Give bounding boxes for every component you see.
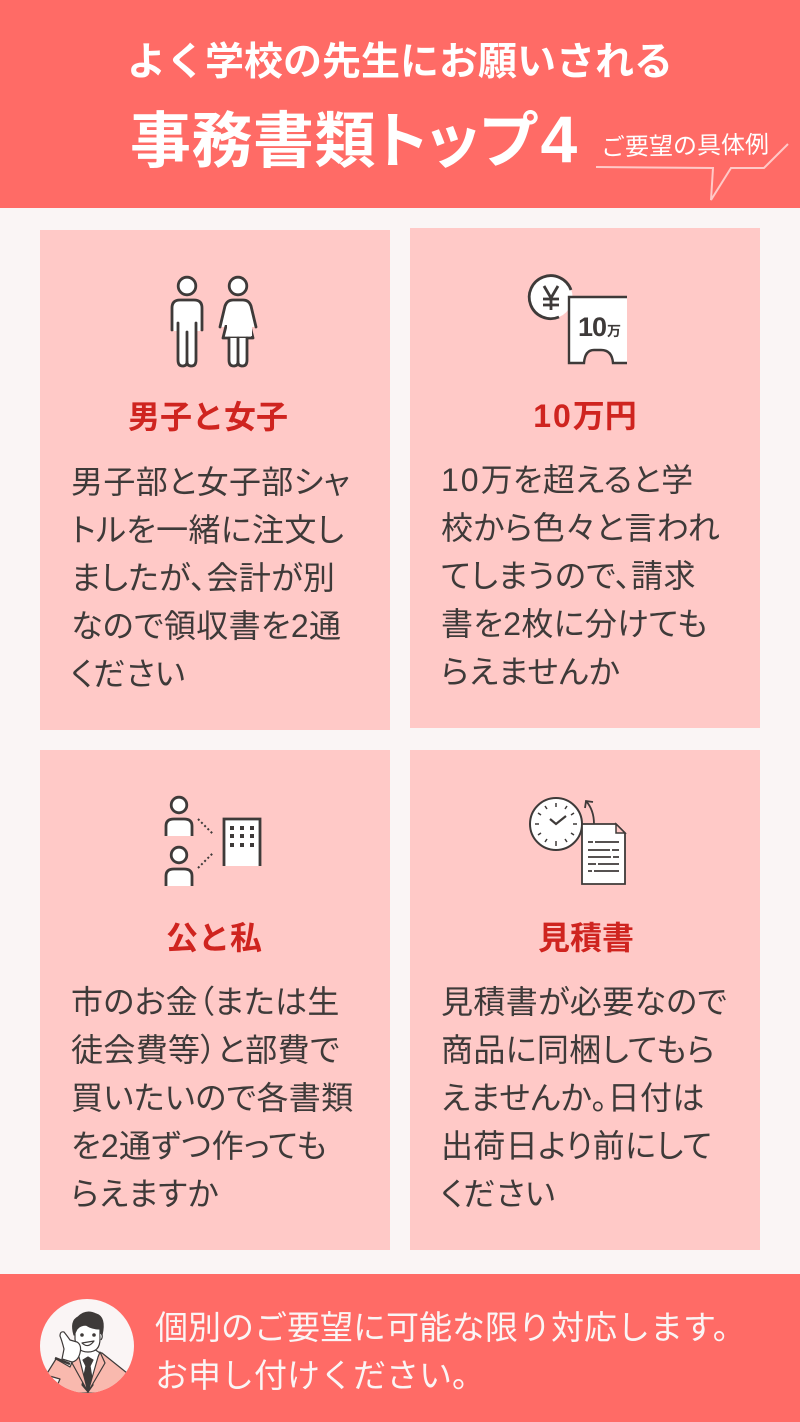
icon: man and woman xyxy=(170,276,258,368)
icon: yen coin and bill: 10 xyxy=(578,312,606,342)
footer message: 個別のご要望に可能な限り対応します。 xyxy=(155,1301,746,1349)
body text: らえますか xyxy=(71,1176,219,1212)
speech bubble stroke xyxy=(596,143,789,200)
avatar: businessman thumbs up xyxy=(40,1299,134,1393)
panel: 見積書 xyxy=(410,750,760,1250)
body text: てしまうので、請求 xyxy=(441,558,696,594)
header band xyxy=(0,0,800,208)
body text: 男子部と女子部シャ xyxy=(71,464,350,500)
body text: 商品に同梱してもら xyxy=(441,1032,715,1068)
body text: 市のお金（または生 xyxy=(71,984,340,1020)
body text: 校から色々と言われ xyxy=(441,510,720,546)
footer band xyxy=(0,1274,800,1422)
panel: 公と私 xyxy=(40,750,390,1250)
body text: なので領収書を2通 xyxy=(71,608,341,644)
body text: 10万を超えると学 xyxy=(441,462,693,498)
heading: 男子と女子 xyxy=(128,399,288,435)
body text: らえませんか xyxy=(441,654,620,690)
body text: ください xyxy=(441,1176,556,1212)
body text: ましたが、会計が別 xyxy=(71,560,335,596)
body text: 見積書が必要なので xyxy=(441,984,727,1020)
handwritten tag: ご要望の具体例 xyxy=(601,125,769,162)
body text: を2通ずつ作っても xyxy=(71,1128,327,1164)
footer message: お申し付けください。 xyxy=(155,1349,485,1397)
heading: 見積書 xyxy=(538,920,634,956)
body text xyxy=(441,984,727,1212)
icon: yen coin and bill xyxy=(528,274,627,364)
body text: 徒会費等）と部費で xyxy=(71,1032,340,1068)
footer message xyxy=(155,1301,746,1397)
icon: people and building xyxy=(164,796,262,886)
panel: 男子と女子 xyxy=(40,230,390,730)
heading: 10万円 xyxy=(533,398,637,434)
icon: yen coin and bill: 万 xyxy=(607,321,621,341)
body text xyxy=(71,984,354,1212)
title line 1: よく学校の先生にお願いされる xyxy=(127,31,673,87)
body text: トルを一緒に注文し xyxy=(71,512,344,548)
body text: ください xyxy=(71,656,186,692)
body text xyxy=(71,464,350,692)
body text: えませんか。日付は xyxy=(441,1080,705,1116)
heading: 公と私 xyxy=(166,920,262,956)
title line 2: 事務書類トップ4 xyxy=(130,102,578,176)
body text: 書を2枚に分けても xyxy=(441,606,708,642)
body text: 出荷日より前にして xyxy=(441,1128,712,1164)
icon: clock and document xyxy=(529,797,627,885)
panel: 10万円 xyxy=(410,228,760,728)
body text xyxy=(441,462,720,690)
body text: 買いたいので各書類 xyxy=(71,1080,354,1116)
